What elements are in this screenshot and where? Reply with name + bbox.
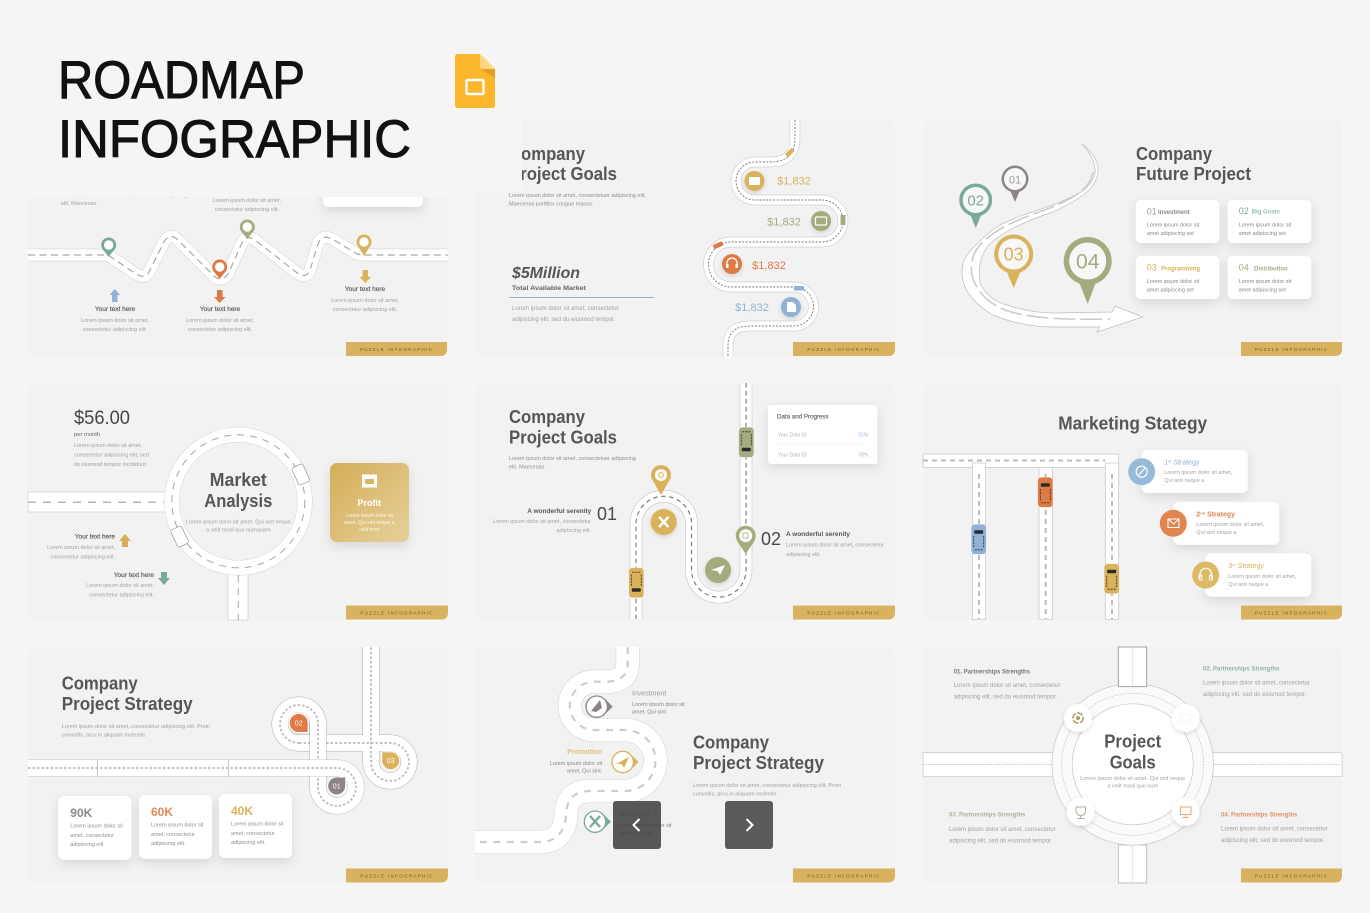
stat card 90K: adipiscing elit. [70, 842, 105, 848]
card 04 [1228, 256, 1311, 299]
panel: roadmap zigzag [28, 120, 448, 357]
strategy card 2: nd [1200, 510, 1206, 516]
item: orange value [722, 254, 786, 274]
card 03: Lorem ipsum dolor sit [1147, 279, 1200, 285]
heading: Project Strategy [62, 694, 193, 714]
text: marketing: Lorem ipsum dolor sit [619, 823, 672, 829]
text: investment [632, 690, 685, 716]
heading [62, 674, 193, 714]
heading: Company [1136, 144, 1212, 164]
text: strength 02: 02. Partnerships Strengths [1203, 667, 1280, 673]
arrow: yellow down [360, 270, 371, 283]
node: dollar [1064, 704, 1092, 732]
price [74, 408, 149, 468]
text: strength 02 [1203, 667, 1310, 698]
text: strength 04 [1221, 813, 1328, 844]
text: investment: amet. Qui sint. [632, 710, 668, 716]
text: intro [693, 783, 841, 798]
heading: Company [509, 144, 585, 164]
text: top centre note: Lorem ipsum dolor sit amet, [213, 198, 281, 204]
text: third note: Your text here [345, 286, 385, 293]
pin 03: 03 [1004, 244, 1024, 264]
badge [793, 342, 895, 356]
node: mint [1172, 704, 1200, 732]
text: investment: Investment [632, 690, 666, 698]
stat card 60K [139, 795, 212, 859]
card: data and progress: Data and Progress [777, 414, 829, 420]
metric: 5 million: Lorem ipsum dolor sit amet, consectetur [512, 306, 619, 312]
card 04: 04 [1239, 262, 1249, 272]
card 03 [1136, 256, 1219, 299]
icon: slides file [455, 54, 495, 108]
card 02: 02 [1239, 206, 1249, 216]
text: strength 02: adipiscing elit, sed do eiusmod tempor. [1203, 692, 1307, 698]
stat card 60K: 60K [151, 805, 173, 819]
heading: Marketing Stategy [1058, 414, 1207, 434]
panel: market analysis [28, 384, 448, 620]
stat card 40K: amet, consectetur [231, 831, 275, 837]
metric: 5 million: $5Million [511, 265, 580, 282]
text: third note: Lorem ipsum dolor sit amet, [331, 298, 399, 304]
card 01: amet adipiscing set [1147, 231, 1194, 237]
text: strength 01 [954, 670, 1060, 700]
text: item 01 [493, 504, 617, 534]
heading: Project Goals [509, 164, 617, 184]
text: strength 01: Lorem ipsum dolor sit amet, consectetur [954, 683, 1060, 689]
stat card 40K: 40K [231, 804, 253, 818]
card 03: 03 [1147, 262, 1157, 272]
badge: PUZZLE INFOGRAPHIC [1255, 610, 1328, 616]
price: Lorem ipsum dolor sit amet, [74, 443, 142, 449]
strategy card 2 [1160, 502, 1279, 545]
card 03: amet adipiscing set [1147, 288, 1194, 294]
arrow: orange down [214, 290, 226, 303]
badge: PUZZLE INFOGRAPHIC [1255, 874, 1328, 878]
nav button: next [725, 801, 773, 849]
card: profit: Lorem ipsum dolor sit [345, 513, 394, 519]
badge [346, 342, 447, 356]
title: ROADMAP [58, 51, 305, 110]
heading [509, 144, 617, 184]
card 04: Lorem ipsum dolor sit [1239, 279, 1292, 285]
car: yellow [1104, 564, 1119, 594]
heading: Goals [1110, 752, 1156, 772]
note: yellow arrow: Your text here [75, 534, 115, 540]
zigzag road [28, 236, 448, 279]
white card fragment [323, 170, 423, 207]
badge [1241, 868, 1342, 882]
text: promotion: Lorem ipsum dolor sit [550, 761, 603, 767]
marker 03: 03 [387, 758, 395, 765]
strategy card 1 [1128, 450, 1248, 493]
text: third note [331, 286, 399, 313]
card 02 [1228, 200, 1311, 243]
card: profit: amet. Qui sint neque a [344, 520, 395, 526]
text: intro [509, 456, 636, 470]
text: item 01: A wonderful serenity [527, 508, 592, 515]
card: data and progress: Your Data 02 [778, 452, 807, 458]
top road [1118, 647, 1147, 687]
stat card 90K: Lorem ipsum dolor sit [70, 824, 123, 830]
card 01 [1136, 200, 1219, 243]
text: first note: consectetur adipiscing elit. [83, 327, 148, 333]
marker 02 [288, 712, 309, 734]
heading [1136, 144, 1251, 184]
strategy card 1: Lorem ipsum dolor sit amet, [1164, 470, 1233, 476]
strategy card 3 [1192, 553, 1311, 597]
price: consectetur adipiscing elit, sed [74, 452, 149, 458]
text: intro: Lorem ipsum dolor sit amet, consectetuer adipiscing [509, 456, 636, 462]
text: intro: elit. Maecenas [509, 464, 545, 470]
strategy card 2: Lorem ipsum dolor sit amet, [1196, 522, 1265, 528]
note: green arrow [86, 572, 170, 598]
text: centre: Lorem ipsum dolor sit amet. Qui sint neque [186, 520, 291, 526]
heading [693, 732, 824, 773]
badge [793, 868, 895, 882]
pin 04: 04 [1076, 250, 1100, 274]
text: strength 03 [949, 813, 1056, 844]
strategy card 2: 2 [1196, 512, 1200, 518]
ring [1052, 684, 1213, 845]
text: centre: a velit modi quo num [1107, 784, 1158, 790]
badge: PUZZLE INFOGRAPHIC [807, 347, 881, 352]
pin 02: 02 [967, 192, 984, 210]
panel: company project goals with cars [475, 383, 895, 620]
badge: PUZZLE INFOGRAPHIC [1255, 347, 1328, 352]
stat card 40K [219, 794, 292, 858]
cross roads [923, 753, 1342, 883]
car outlines on roundabout [170, 463, 310, 548]
card 01: Investment [1158, 210, 1190, 216]
marker 03 [382, 752, 400, 770]
card: profit: velit mod [359, 527, 380, 533]
text: promotion: Promotion [567, 749, 602, 756]
text: promotion [550, 749, 603, 774]
stat card 40K: adipiscing elit. [231, 840, 266, 846]
text: strength 03: Lorem ipsum dolor sit amet, consectetur [949, 827, 1056, 833]
title: INFOGRAPHIC [58, 110, 411, 169]
stat card 40K: Lorem ipsum dolor sit [231, 822, 284, 828]
pin: orange [212, 260, 227, 279]
heading: Company [693, 732, 769, 752]
panel: company project strategy knot roads [28, 647, 448, 883]
marker 01: 01 [333, 784, 341, 790]
card 03: Programming [1161, 266, 1200, 272]
text: item 02: 02 [761, 529, 781, 549]
heading: Future Project [1136, 164, 1251, 184]
text: marketing [619, 812, 672, 837]
item: olive value [767, 211, 831, 231]
badge [1241, 342, 1342, 356]
text: second note [186, 306, 254, 333]
stat card 90K: amet, consectetur [70, 833, 114, 839]
title cover [0, 0, 522, 197]
text: top centre note: consectetur adipiscing elit. [215, 207, 280, 213]
card: data and progress [768, 405, 878, 464]
pin: yellow [651, 465, 671, 495]
strategy card 3: 3 [1228, 563, 1232, 570]
text: item 01: Lorem ipsum dolor sit amet, consectetur [493, 519, 591, 525]
price: $56.00 [74, 408, 130, 429]
text: item 02 [761, 529, 884, 558]
road network [923, 454, 1119, 620]
text: investment: Lorem ipsum dolor sit [632, 702, 685, 708]
strategy card 1: 1 [1164, 460, 1168, 466]
strategy card 3: rd [1232, 562, 1236, 567]
pin: yellow [356, 234, 372, 256]
badge [346, 868, 448, 882]
heading [1104, 732, 1161, 772]
item: orange value: $1,832 [752, 260, 786, 272]
node: monitor [1172, 798, 1200, 826]
text: strength 01: adipiscing elit, sed do eiusmod tempor. [954, 694, 1057, 700]
winding road [708, 120, 843, 357]
text: top left fragment second line: elit. Maecenas [61, 201, 97, 207]
text: strength 02: Lorem ipsum dolor sit amet, consectetur [1203, 680, 1310, 686]
item: yellow value: $1,832 [777, 176, 811, 188]
S road [636, 383, 746, 619]
text: strength 04: adipiscing elit, sed do eiusmod tempor. [1221, 838, 1325, 844]
text: intro: Lorem ipsum dolor sit amet, consectetur adipiscing elit. Proin [693, 783, 841, 789]
car: orange [1038, 477, 1053, 507]
arrow: blue up [110, 289, 120, 302]
circle: tools [651, 509, 677, 535]
car: yellow [629, 568, 644, 598]
card 02: amet adipiscing set [1239, 231, 1286, 237]
panel: company project goals winding road [475, 120, 895, 357]
text: top left fragment: Lorem ipsum dolor sit amet, consectetuer adipiscing [61, 193, 188, 199]
text: strength 01: 01. Partnerships Strengths [954, 670, 1031, 676]
pin 04 [1064, 237, 1112, 304]
heading [509, 407, 617, 448]
card: profit [330, 463, 409, 542]
S road [475, 647, 655, 842]
heading: Company [62, 674, 138, 694]
text: intro: Lorem ipsum dolor sit amet, consectetuer adipiscing elit. [509, 193, 646, 199]
heading: Market [210, 470, 267, 490]
text: item 01: 01 [597, 504, 617, 524]
text: intro: convallis, arcu in aliquam molestie. [62, 732, 147, 738]
stat card 90K: 90K [70, 806, 93, 820]
nav button: previous [613, 801, 661, 849]
card: data and progress: 78% [858, 452, 869, 458]
text: item 02: Lorem ipsum dolor sit amet, consectetur [786, 542, 884, 548]
node: trophy [1067, 798, 1095, 826]
stat card 60K: amet, consectetur [151, 832, 195, 838]
text: strength 04: Lorem ipsum dolor sit amet, consectetur [1221, 826, 1328, 832]
small cars [713, 148, 846, 290]
pin: olive [736, 526, 756, 554]
panel: marketing strategy [923, 384, 1342, 620]
pin: olive [240, 220, 255, 239]
pin 02 [959, 184, 992, 228]
heading: Project Strategy [693, 753, 824, 773]
text: promotion: amet. Qui sint. [567, 768, 603, 774]
card 01: 01 [1147, 206, 1157, 216]
card 04: amet adipiscing set [1239, 288, 1286, 294]
badge [346, 606, 448, 620]
stat card 60K: Lorem ipsum dolor sit [151, 822, 204, 828]
text: intro: Maecenas porttitor congue massa. [509, 202, 594, 208]
strategy card 2: Qui sint neque a [1196, 530, 1237, 536]
note: yellow arrow [47, 534, 131, 560]
card 04: Distribution [1254, 266, 1288, 272]
pin 01: 01 [1009, 174, 1021, 186]
title [58, 51, 411, 169]
card: data and progress: 55% [858, 432, 869, 438]
roundabout road [28, 435, 305, 620]
item: blue value [735, 297, 801, 317]
heading: Project Goals [509, 428, 617, 448]
strategy card 1: Strategy [1171, 460, 1200, 466]
text: strength 03: 03. Partnerships Strengths [949, 813, 1026, 819]
text: centre: Lorem ipsum dolor sit amet. Qui sint neque [1080, 776, 1185, 782]
metric: 5 million [509, 265, 654, 323]
text: centre: a velit modi quo numquam [206, 528, 271, 534]
card 02: Lorem ipsum dolor sit [1239, 222, 1292, 228]
card: profit: Profit [358, 498, 381, 508]
panel: project goals [923, 647, 1342, 883]
note: green arrow: consectetur adipiscing elit. [89, 592, 154, 598]
badge: PUZZLE INFOGRAPHIC [360, 347, 433, 352]
marker 02: 02 [295, 720, 303, 728]
text: item 01: adipiscing elit. [556, 528, 591, 534]
note: yellow arrow: consectetur adipiscing elit. [50, 554, 115, 560]
text: second note: consectetur adipiscing elit. [188, 327, 253, 333]
marker 01 [328, 777, 346, 795]
note: yellow arrow: Lorem ipsum dolor sit amet, [47, 545, 115, 551]
item: olive value: $1,832 [767, 216, 801, 228]
badge: PUZZLE INFOGRAPHIC [360, 874, 434, 878]
strategy card 3: Strategy [1236, 563, 1264, 570]
strategy card 1: st [1168, 458, 1172, 464]
text: centre [1080, 776, 1185, 790]
badge [1241, 606, 1342, 620]
text: top centre note [213, 198, 281, 213]
stat card 60K: adipiscing elit. [151, 841, 186, 847]
metric: 5 million: adipiscing elit, sed do eiusmod tempor. [512, 317, 616, 323]
car: olive [739, 427, 754, 457]
card 02: Big Goals [1252, 210, 1280, 216]
strategy card 1: Qui sint neque a [1164, 478, 1205, 484]
marker: promotion [612, 751, 638, 773]
arrow road [962, 144, 1143, 332]
price: do eiusmod tempor incididunt. [74, 462, 148, 468]
pin 01 [1002, 166, 1028, 202]
text: strength 03: adipiscing elit, sed do eiusmod tempor. [949, 838, 1053, 844]
text: third note: consectetur adipiscing elit. [333, 307, 398, 313]
stat card 90K [58, 796, 131, 860]
text: item 02: A wonderful serenity [786, 531, 850, 538]
item: blue value: $1,832 [735, 302, 769, 314]
strategy card 3: Qui sint neque a [1228, 582, 1269, 588]
text: marketing: Marketing [619, 812, 650, 819]
text: first note: Your text here [95, 306, 135, 313]
text: marketing: amet. Qui sint. [619, 831, 655, 837]
text: second note: Lorem ipsum dolor sit amet, [186, 318, 254, 324]
marker: investment [586, 696, 613, 717]
strategy card 3: Lorem ipsum dolor sit amet, [1228, 574, 1297, 580]
heading: Project [1104, 732, 1161, 752]
card: data and progress: Your Data 01 [778, 432, 807, 438]
text: centre [186, 520, 291, 534]
strategy card 2: Strategy [1205, 512, 1235, 518]
panel: company project strategy s road [475, 647, 895, 883]
badge: PUZZLE INFOGRAPHIC [360, 610, 434, 616]
pin 03 [994, 234, 1033, 288]
knot road [28, 647, 409, 806]
badge: PUZZLE INFOGRAPHIC [807, 874, 881, 878]
badge [793, 606, 895, 620]
circle: paper plane [705, 557, 731, 583]
heading: Company [509, 407, 585, 427]
marker: marketing [584, 811, 611, 832]
text: first note: Lorem ipsum dolor sit amet, [81, 318, 149, 324]
text: strength 04: 04. Partnerships Strengths [1221, 813, 1298, 819]
text: second note: Your text here [200, 306, 240, 313]
text: intro: convallis, arcu in aliquam molestie. [693, 792, 778, 798]
text: item 02: adipiscing elit. [786, 552, 821, 558]
card 01: Lorem ipsum dolor sit [1147, 222, 1200, 228]
heading [204, 470, 272, 511]
panel: company future project [923, 120, 1342, 357]
metric: 5 million: Total Available Market [512, 285, 587, 292]
note: green arrow: Lorem ipsum dolor sit amet, [86, 583, 154, 589]
text: intro: Lorem ipsum dolor sit amet, consectetur adipiscing elit. Proin [62, 724, 210, 730]
badge: PUZZLE INFOGRAPHIC [807, 610, 881, 616]
pin: green [101, 238, 116, 257]
text: intro [509, 193, 646, 208]
car: blue [971, 524, 986, 554]
text: intro [62, 724, 210, 738]
heading: Analysis [204, 491, 272, 511]
note: green arrow: Your text here [114, 572, 154, 579]
price: per month [74, 432, 100, 438]
item: yellow value [744, 171, 811, 191]
text: first note [81, 306, 149, 333]
